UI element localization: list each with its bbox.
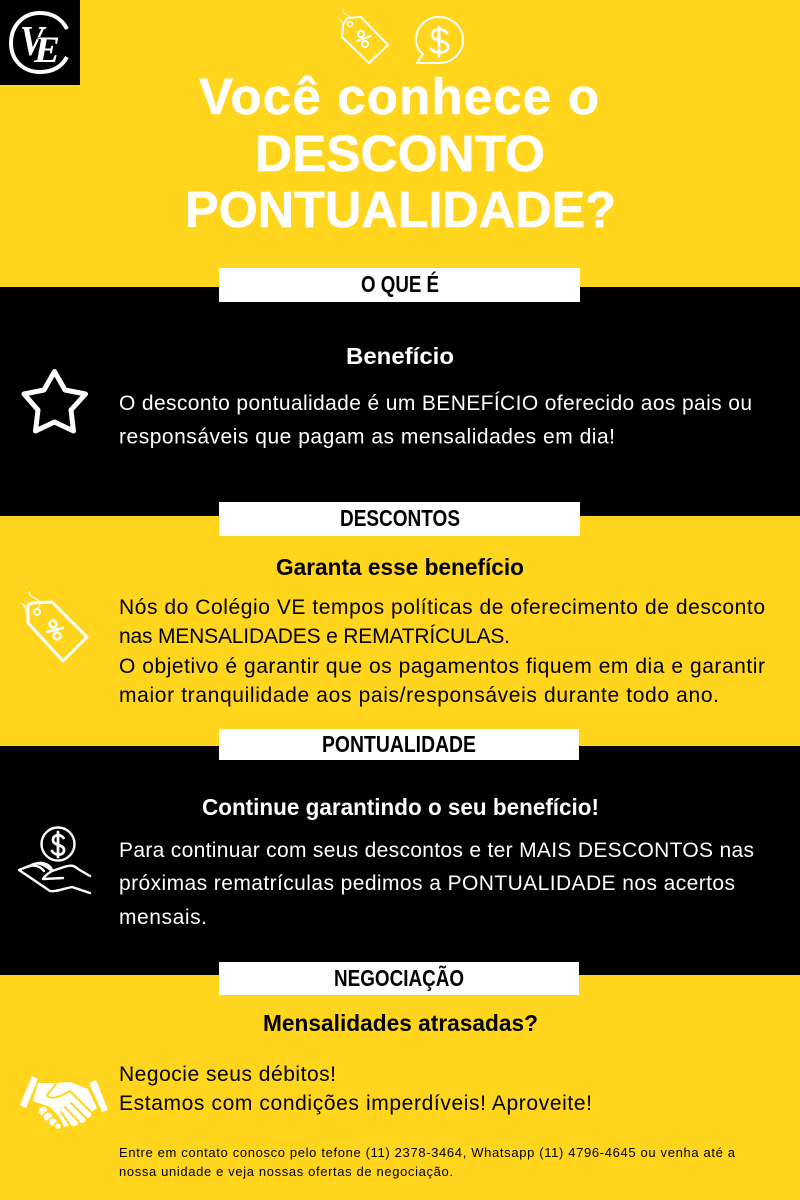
icon: hand with coin bbox=[19, 828, 90, 893]
title bbox=[185, 68, 616, 238]
text block: contato: Entre em contato conosco pelo tefone (11) 2378-3464, Whatsapp (11) 4796-4645 ou venha até a bbox=[119, 1145, 736, 1160]
text block: contato: nossa unidade e veja nossas ofertas de negociação. bbox=[119, 1164, 453, 1179]
panel: descontos bbox=[0, 516, 800, 746]
label: negociação bbox=[219, 962, 579, 995]
text block: descontos: maior tranquilidade aos pais/responsáveis durante todo ano. bbox=[119, 684, 719, 707]
title: Você conhece o bbox=[199, 68, 599, 125]
text block: descontos: O objetivo é garantir que os pagamentos fiquem em dia e garantir bbox=[119, 655, 765, 678]
heading: benefício: Benefício bbox=[346, 343, 454, 369]
label: pontualidade bbox=[219, 729, 579, 760]
heading: garanta esse benefício: Garanta esse benefício bbox=[276, 554, 524, 580]
text block: pontualidade: mensais. bbox=[119, 906, 207, 929]
background: top yellow band bbox=[0, 0, 800, 287]
text block: negociação: Negocie seus débitos! bbox=[119, 1063, 336, 1086]
text block: negociação: Estamos com condições imperdíveis! Aproveite! bbox=[119, 1092, 592, 1115]
title: PONTUALIDADE? bbox=[185, 181, 616, 238]
title: DESCONTO bbox=[255, 125, 545, 182]
icon: header price tag bbox=[338, 9, 388, 63]
text block: benefício bbox=[119, 392, 752, 448]
panel: o que é bbox=[0, 287, 800, 516]
logo: E bbox=[33, 30, 60, 71]
text block: descontos bbox=[119, 596, 765, 707]
text block: descontos: Nós do Colégio VE tempos políticas de oferecimento de desconto bbox=[119, 596, 765, 619]
logo: V bbox=[20, 19, 47, 65]
icon: star bbox=[24, 372, 86, 431]
icon: header dollar bubble bbox=[416, 17, 463, 63]
icon: price tag bbox=[22, 591, 87, 661]
text block: benefício: O desconto pontualidade é um BENEFÍCIO oferecido aos pais ou bbox=[119, 392, 752, 415]
text block: benefício: responsáveis que pagam as mensalidades em dia! bbox=[119, 426, 615, 448]
label: o que é: O QUE É bbox=[361, 270, 439, 297]
panel: pontualidade bbox=[0, 746, 800, 975]
heading: mensalidades atrasadas: Mensalidades atrasadas? bbox=[263, 1010, 538, 1036]
label: negociação: NEGOCIAÇÃO bbox=[334, 964, 464, 991]
text block: pontualidade: próximas rematrículas pedimos a PONTUALIDADE nos acertos bbox=[119, 872, 735, 895]
panel: negociação bbox=[0, 975, 800, 1200]
text block: pontualidade: Para continuar com seus descontos e ter MAIS DESCONTOS nas bbox=[119, 839, 754, 862]
label: o que é bbox=[219, 268, 580, 302]
logo bbox=[0, 0, 80, 85]
label: descontos bbox=[219, 502, 580, 536]
icon: handshake bbox=[20, 1076, 108, 1130]
text block: descontos: nas MENSALIDADES e REMATRÍCULAS. bbox=[119, 625, 510, 648]
label: descontos: DESCONTOS bbox=[340, 505, 460, 531]
text block: negociação bbox=[119, 1063, 592, 1115]
heading: continue garantindo: Continue garantindo o seu benefício! bbox=[202, 794, 599, 820]
text block: contato bbox=[119, 1145, 736, 1179]
label: pontualidade: PONTUALIDADE bbox=[322, 731, 476, 757]
text block: pontualidade bbox=[119, 839, 754, 929]
